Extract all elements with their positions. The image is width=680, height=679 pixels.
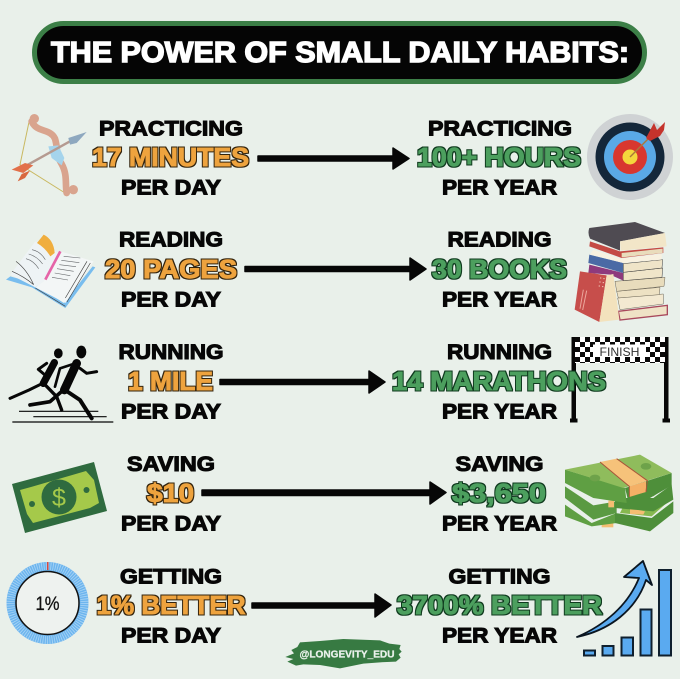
row: saving, per year: PER YEAR	[442, 512, 557, 536]
row: saving, per day: SAVING	[127, 453, 215, 476]
icon: money stacks	[565, 455, 673, 531]
row: saving, per year: $3,650	[452, 478, 546, 508]
arrow: practicing	[258, 148, 409, 169]
title banner: THE POWER OF SMALL DAILY HABITS:	[51, 37, 629, 69]
row: reading, per day: PER DAY	[121, 288, 221, 312]
icon: dollar bill	[12, 462, 107, 533]
icon: runners	[10, 346, 113, 422]
row: getting, per day	[96, 566, 246, 648]
row: running, per day	[118, 341, 224, 424]
row: saving, per day: $10	[147, 478, 194, 508]
icon: growth chart	[577, 561, 671, 656]
row: getting, per year	[397, 566, 602, 648]
row: running, per year: RUNNING	[447, 341, 552, 364]
row: running, per year	[392, 341, 606, 424]
icon: finish line	[570, 337, 670, 422]
row: practicing, per year: PER YEAR	[442, 176, 557, 200]
row: practicing, per year: 100+ HOURS	[417, 142, 581, 172]
row: reading, per day: READING	[119, 228, 223, 252]
row: getting, per year: GETTING	[448, 566, 550, 588]
title banner	[34, 24, 644, 82]
watermark badge	[285, 639, 402, 668]
row: running, per day: 1 MILE	[128, 366, 213, 396]
icon: bow and arrow	[12, 114, 87, 194]
icon: one percent ring: 1%	[36, 594, 60, 615]
row: practicing, per day: PER DAY	[121, 176, 221, 200]
icon: open book	[6, 235, 95, 308]
row: running, per year: PER YEAR	[442, 400, 557, 424]
row: running, per day: RUNNING	[118, 341, 224, 364]
arrow: reading	[245, 258, 426, 280]
row: practicing, per year: PRACTICING	[428, 118, 572, 140]
row: saving, per year	[442, 453, 557, 536]
row: reading, per year: READING	[448, 228, 552, 252]
row: saving, per day: PER DAY	[121, 512, 221, 536]
row: reading, per year	[432, 228, 567, 312]
icon: target	[587, 114, 673, 200]
row: practicing, per year	[417, 118, 581, 200]
icon: stack of books	[575, 222, 667, 322]
icon: one percent ring	[10, 562, 84, 640]
row: reading, per day: 20 PAGES	[105, 254, 237, 284]
row: getting, per year: 3700% BETTER	[397, 590, 602, 620]
row: saving, per year: SAVING	[456, 453, 544, 476]
row: getting, per day: 1% BETTER	[96, 590, 246, 620]
row: practicing, per day	[92, 118, 249, 200]
row: getting, per day: GETTING	[120, 566, 222, 588]
row: reading, per year: PER YEAR	[442, 288, 557, 312]
row: getting, per day: PER DAY	[121, 624, 221, 648]
row: reading, per year: 30 BOOKS	[432, 254, 567, 284]
row: saving, per day	[121, 453, 221, 536]
row: practicing, per day: PRACTICING	[99, 118, 243, 140]
arrow: saving	[202, 482, 446, 504]
arrow: getting	[252, 594, 391, 617]
watermark badge: @LONGEVITY_EDU	[300, 650, 394, 660]
row: running, per day: PER DAY	[121, 400, 221, 424]
row: getting, per year: PER YEAR	[442, 624, 557, 648]
icon: dollar bill: $	[52, 484, 66, 512]
arrow: running	[220, 371, 385, 393]
row: reading, per day	[105, 228, 237, 312]
row: practicing, per day: 17 MINUTES	[92, 142, 249, 172]
icon: finish line: FINISH	[600, 345, 640, 359]
row: running, per year: 14 MARATHONS	[392, 366, 606, 396]
